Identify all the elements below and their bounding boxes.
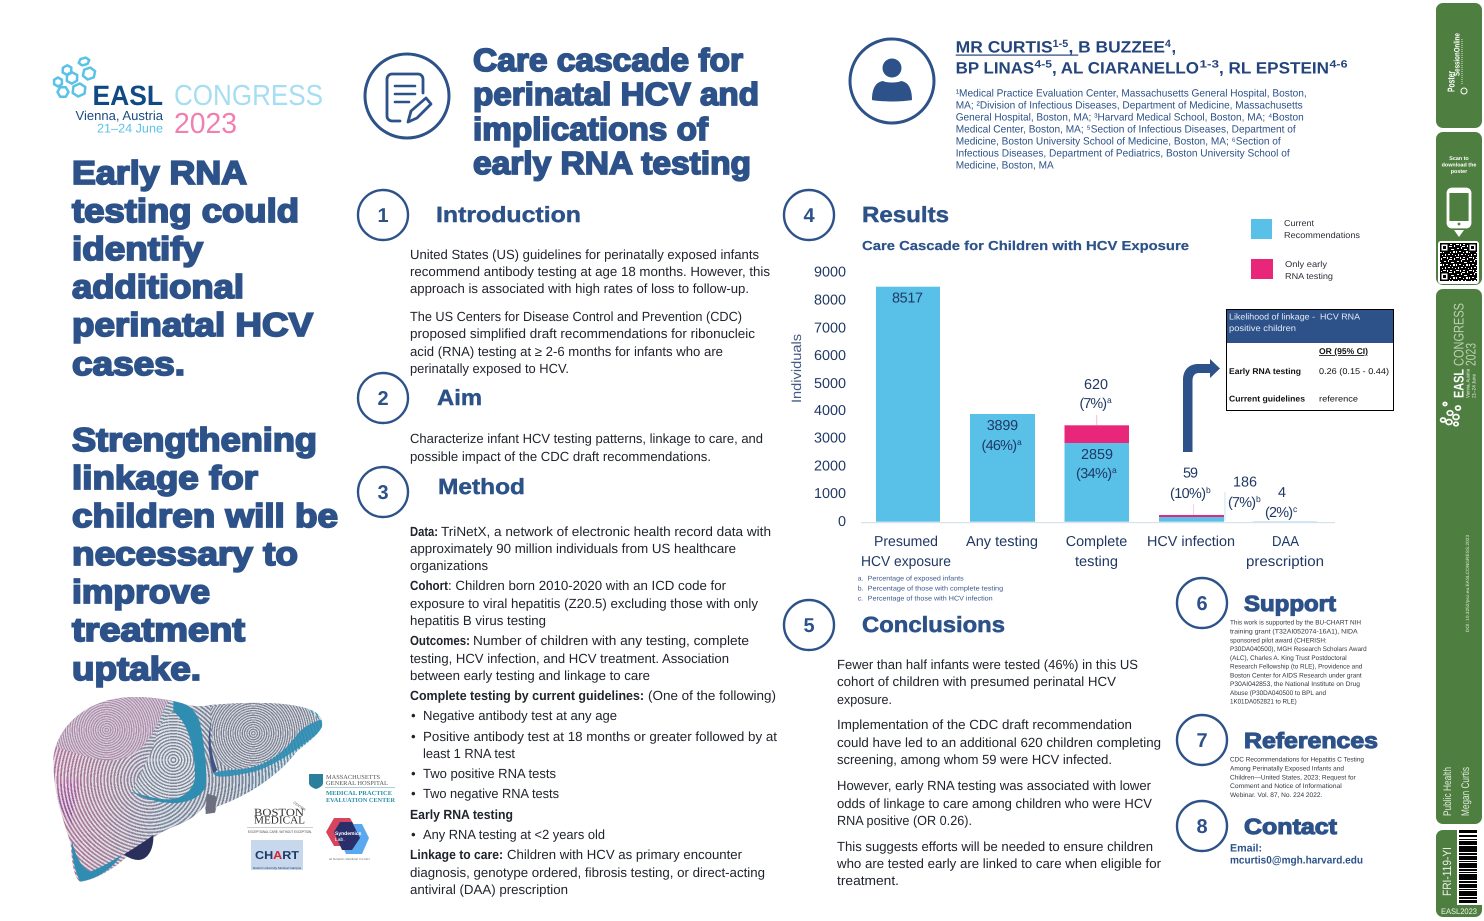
data labels: a	[1112, 465, 1117, 475]
section 5: conclusions: Conclusions	[862, 612, 1005, 637]
sidebar: EASL congress and session info: 2023	[1462, 343, 1478, 366]
chart footnotes: c.	[858, 596, 863, 603]
x axis labels: DAA	[1272, 534, 1299, 550]
support text: training grant (T32AI052074-16A1), NIDA	[1230, 629, 1358, 636]
method text: Early RNA testing	[410, 807, 513, 822]
y axis labels: 0	[838, 514, 846, 530]
method text: Linkage to care:	[410, 847, 503, 862]
x axis labels: HCV infection	[1147, 534, 1235, 550]
table: likelihood of linkage: reference	[1319, 394, 1358, 404]
method text: Positive antibody test at 18 months or greater followed by at	[423, 729, 777, 744]
bar chart: care cascade	[789, 265, 1335, 570]
data labels: c	[1293, 504, 1298, 514]
data labels: 3899	[987, 418, 1018, 434]
support text: This work is supported by the BU-CHART NIH	[1230, 620, 1361, 627]
sidebar: scan QR code	[1436, 132, 1482, 285]
sidebar: poster session online: SessionOnline	[1452, 33, 1462, 76]
support text: sponsored pilot award (CHERISH:	[1230, 637, 1327, 644]
support text: (ALC), Charles A. King Trust Postdoctoral	[1230, 655, 1347, 662]
method text: •	[411, 729, 416, 744]
introduction text: approach is associated with high rates of loss to follow-up.	[410, 281, 749, 296]
section 8: contact: Contact	[1244, 814, 1338, 839]
data labels: a	[1017, 437, 1022, 447]
data labels: 2859	[1081, 447, 1113, 463]
section 8: contact: 8	[1196, 816, 1208, 838]
method text: Cohort	[410, 578, 448, 593]
affiliations: Medicine, Boston University School of Medicine, Boston, MA; ⁶Section of	[956, 136, 1281, 148]
logo: Syndemics Lab: Syndemics	[335, 831, 362, 837]
title	[473, 42, 759, 181]
headline: key messages: Strengthening	[72, 421, 317, 458]
conclusions text: odds of linkage to care among children who were HCV	[837, 796, 1152, 811]
method text: Two negative RNA tests	[423, 786, 559, 801]
y axis title: Individuals	[789, 334, 804, 403]
title: perinatal HCV and	[473, 76, 759, 112]
section 5: conclusions	[784, 600, 1162, 888]
method text: exposure to viral hepatitis (Z20.5) excluding those with only	[410, 596, 758, 611]
introduction text: The US Centers for Disease Control and Prevention (CDC)	[410, 309, 742, 324]
section 7: references: 7	[1196, 730, 1208, 752]
data labels: 620	[1084, 377, 1108, 393]
authors: 4-5	[1034, 59, 1052, 71]
section 2: aim: 2	[377, 388, 389, 410]
y axis labels	[814, 265, 846, 530]
y axis labels: 9000	[814, 265, 846, 281]
logo: EASL Congress 2023: Vienna, Austria	[76, 108, 164, 123]
method text: (One of the following)	[648, 688, 776, 703]
method text: hepatitis B virus testing	[410, 613, 546, 628]
table: likelihood of linkage: OR (95% CI)	[1319, 346, 1368, 356]
reference text: Among Perinatally Exposed Infants and	[1230, 766, 1344, 773]
method text: Data:	[410, 524, 438, 539]
data labels	[892, 291, 1298, 521]
method text: : Children born 2010-2020 with an ICD code for	[448, 578, 727, 593]
legend: RNA testing	[1285, 271, 1333, 281]
data labels: b	[1256, 494, 1261, 504]
aim text	[410, 431, 763, 464]
logo: Massachusetts General Hospital: GENERAL HOSPITAL	[326, 780, 388, 787]
x axis labels	[861, 534, 1324, 570]
sidebar: EASL congress and session info	[1436, 289, 1482, 824]
table: likelihood of linkage	[1226, 310, 1394, 410]
legend	[1251, 218, 1360, 281]
data labels: (7%)	[1080, 396, 1107, 412]
title: implications of	[473, 111, 708, 147]
sidebar: EASL congress and session info: Vienna, Austria	[1466, 369, 1472, 398]
logo: Massachusetts General Hospital	[309, 774, 396, 804]
method text: approximately 90 million individuals from US healthcare	[410, 541, 736, 556]
introduction text: United States (US) guidelines for perinatally exposed infants	[410, 247, 759, 262]
logo: Massachusetts General Hospital: EVALUATION CENTER	[326, 797, 396, 804]
section 2: aim	[358, 373, 763, 464]
method text: Complete testing by current guidelines:	[410, 688, 644, 703]
authors	[956, 38, 1348, 77]
sidebar: poster session online	[1436, 3, 1482, 128]
section 1: introduction	[358, 190, 770, 376]
authors: 1-5	[1053, 38, 1068, 50]
logo: Syndemics Lab	[326, 818, 370, 861]
authors: BP LINAS	[956, 59, 1034, 77]
sidebar: EASL congress and session info: Public Health	[1442, 767, 1454, 816]
section 6: support	[1177, 578, 1367, 706]
y axis labels: 3000	[814, 431, 846, 447]
table: likelihood of linkage: Likelihood of linkage - HCV RNA	[1229, 311, 1360, 321]
headline: key messages: perinatal HCV	[72, 306, 313, 343]
chart footnotes: b.	[858, 586, 863, 593]
method text: •	[411, 827, 416, 842]
support text: Boston Center for AIDS Research under grant	[1230, 672, 1362, 679]
section 6: support: Support	[1244, 591, 1337, 616]
chart title: Care Cascade for Children with HCV Exposure	[862, 238, 1189, 253]
headline: key messages: necessary to	[72, 535, 298, 572]
sidebar: EASL congress and session info: DOI: 10.3252/pso.eu.EASLCONGRESS.2023	[1465, 535, 1470, 632]
y axis labels: 8000	[814, 293, 846, 309]
section 5: conclusions: 5	[803, 615, 815, 637]
introduction text: recommend antibody testing at age 18 months. However, this	[410, 264, 770, 279]
section 4: results heading: Results	[862, 202, 949, 227]
authors: 4	[1165, 38, 1171, 50]
conclusions text: screening, among whom 59 were HCV infected.	[837, 752, 1112, 767]
data labels: (46%)	[982, 438, 1017, 454]
affiliations: General Hospital, Boston, MA; ³Harvard Medical School, Boston, MA; ⁴Boston	[956, 112, 1304, 124]
sidebar: abstract number and barcode: FRI-119-YI	[1440, 847, 1454, 896]
affiliations	[956, 88, 1307, 172]
method text: diagnosis, genotype ordered, fibrosis testing, or direct-acting	[410, 865, 765, 880]
reference text: Comment and Notice of Informational	[1230, 783, 1342, 790]
support text: Abuse (P30DA040500 to BPL and	[1230, 690, 1326, 697]
method text: •	[411, 786, 416, 801]
affiliations: ¹Medical Practice Evaluation Center, Massachusetts General Hospital, Boston,	[956, 88, 1307, 100]
table: likelihood of linkage: positive children	[1229, 323, 1296, 333]
legend: Current	[1284, 218, 1315, 228]
section 7: references: References	[1244, 728, 1378, 753]
y axis labels: 1000	[814, 486, 846, 502]
authors: , RL EPSTEIN	[1219, 59, 1329, 77]
bars: current recommendations	[876, 287, 1317, 522]
affiliations: Medical Center, Boston, MA; ⁵Section of Infectious Diseases, Department of	[956, 124, 1296, 136]
method text: •	[411, 766, 416, 781]
support text: 1K01DA052821 to RLE)	[1230, 699, 1297, 706]
method text	[410, 524, 777, 897]
introduction text: acid (RNA) testing at ≥ 2-6 months for infants who are	[410, 344, 723, 359]
chart footnotes: Percentage of those with HCV infection	[868, 596, 993, 603]
logo: Boston Medical Center: EXCEPTIONAL CARE. WITHOUT EXCEPTION.	[248, 830, 312, 834]
conclusions text: who are tested early are linked to care when eligible for	[836, 856, 1162, 871]
legend: Only early	[1285, 259, 1328, 269]
data labels: (10%)	[1170, 486, 1206, 502]
x axis labels: Complete	[1066, 534, 1127, 550]
data labels: (34%)	[1076, 466, 1112, 482]
arrow: to odds ratio table	[1183, 359, 1220, 452]
support text	[1230, 620, 1367, 706]
conclusions text: cohort of children with presumed perinatal HCV	[837, 674, 1116, 689]
section 1: introduction: Introduction	[436, 202, 581, 227]
x axis labels: Presumed	[874, 534, 938, 550]
icon: document with pencil	[365, 54, 449, 138]
sidebar: EASL congress and session info: EASL	[1450, 369, 1466, 398]
title: early RNA testing	[473, 145, 751, 181]
conclusions text: could have led to an additional 620 children completing	[837, 735, 1161, 750]
logo: Syndemics Lab: at Boston Medical Center	[329, 857, 370, 861]
method text: antiviral (DAA) prescription	[410, 882, 568, 897]
title: Care cascade for	[473, 42, 743, 78]
icon: phone	[1448, 189, 1470, 227]
authors: , AL CIARANELLO	[1052, 59, 1199, 77]
data labels: 186	[1233, 475, 1257, 491]
logo: EASL Congress 2023: 2023	[174, 108, 237, 140]
authors: , B BUZZEE	[1068, 39, 1165, 57]
sidebar: scan QR code: Scan to	[1449, 156, 1469, 162]
x axis labels: prescription	[1246, 554, 1324, 570]
headline: key messages: Early RNA	[72, 154, 247, 191]
sidebar: scan QR code: poster	[1451, 169, 1468, 175]
affiliations: Infectious Diseases, Department of Pediatrics, Boston University School of	[956, 148, 1290, 160]
logo: Syndemics Lab: Lab.	[335, 837, 345, 843]
conclusions text: treatment.	[837, 873, 899, 888]
method text: between early testing and linkage to care	[410, 668, 650, 683]
x axis labels: HCV exposure	[861, 554, 951, 570]
sidebar: EASL congress and session info: CONGRESS	[1450, 303, 1466, 366]
table: likelihood of linkage: Early RNA testing	[1229, 366, 1301, 376]
authors: ,	[1172, 39, 1176, 57]
method text: testing, HCV infection, and HCV treatment. Association	[410, 651, 729, 666]
sidebar: abstract number and barcode: EASL2023	[1441, 907, 1478, 916]
logo: CHART: Boston University Medical Campus	[253, 866, 302, 870]
contact email: mcurtis0@mgh.harvard.edu	[1230, 855, 1363, 867]
table: likelihood of linkage: 0.26 (0.15 - 0.44)	[1319, 366, 1389, 376]
section 6: support: 6	[1196, 593, 1208, 615]
y axis labels: 6000	[814, 348, 846, 364]
contact email: Email:	[1230, 843, 1262, 855]
method text: least 1 RNA test	[423, 746, 515, 761]
logo: Boston Medical Center	[247, 801, 313, 834]
chart footnotes: Percentage of those with complete testing	[868, 586, 1003, 593]
logo: EASL Congress 2023: 21–24 June	[97, 122, 163, 136]
barcode	[1459, 830, 1477, 903]
section 3: method: Method	[438, 474, 525, 499]
logo: Massachusetts General Hospital: MEDICAL PRACTICE	[326, 790, 392, 797]
chart footnotes: Percentage of exposed infants	[868, 576, 964, 583]
section 4: results heading	[784, 190, 949, 240]
method text: TriNetX, a network of electronic health record data with	[441, 524, 771, 539]
chart footnotes: a.	[858, 576, 863, 583]
sidebar: scan QR code: download the	[1442, 162, 1476, 168]
headline: key messages: improve	[72, 573, 210, 610]
bars: only early RNA testing	[1064, 425, 1224, 517]
headline: key messages: children will be	[72, 497, 338, 534]
y axis labels: 5000	[814, 376, 846, 392]
logo: CHART	[251, 840, 303, 870]
headline: key messages: treatment	[72, 611, 245, 648]
table: likelihood of linkage: Current guidelines	[1229, 394, 1305, 404]
support text: P30DA040500), MGH Research Scholars Award	[1230, 646, 1367, 653]
data labels: b	[1206, 485, 1211, 495]
sidebar: EASL congress and session info: Megan Curtis	[1460, 767, 1472, 816]
affiliations: MA; ²Division of Infectious Diseases, Department of Medicine, Massachusetts	[956, 100, 1303, 112]
aim text: Characterize infant HCV testing patterns, linkage to care, and	[410, 431, 763, 446]
headline: key messages: uptake.	[72, 650, 201, 687]
logo: Boston Medical Center: CENTER	[292, 801, 307, 812]
QR code	[1438, 241, 1479, 284]
logo: Boston Medical Center: BOSTON	[254, 807, 304, 819]
section 2: aim: Aim	[437, 385, 482, 410]
method text: Children with HCV as primary encounter	[507, 847, 743, 862]
headline: key messages: linkage for	[72, 459, 258, 496]
logo: EASL Congress 2023	[52, 57, 323, 140]
logo: CHART: CHART	[255, 850, 299, 862]
introduction text	[410, 247, 770, 376]
reference text: Children—United States, 2023; Request for	[1230, 774, 1356, 781]
headline: key messages	[72, 154, 338, 687]
conclusions text	[836, 657, 1162, 888]
support text: Research Fellowship (to RLE), Providence and	[1230, 664, 1363, 671]
data labels: 4	[1278, 485, 1286, 501]
y axis labels: 2000	[814, 459, 846, 475]
conclusions text: Implementation of the CDC draft recommendation	[837, 717, 1132, 732]
method text: Outcomes:	[410, 633, 470, 648]
contact email	[1230, 843, 1363, 867]
method text: •	[411, 708, 416, 723]
reference text: Webinar. Vol. 87, No. 224 2022.	[1230, 792, 1322, 799]
section 4: results heading: 4	[803, 205, 815, 227]
logo: Massachusetts General Hospital: MASSACHUSETTS	[326, 774, 381, 781]
logo: EASL Congress 2023: CONGRESS	[174, 80, 323, 112]
introduction text: perinatally exposed to HCV.	[410, 361, 569, 376]
section 8: contact	[1177, 801, 1363, 867]
headline: key messages: testing could	[72, 192, 299, 229]
legend: Recommendations	[1284, 230, 1360, 240]
data labels: 59	[1183, 466, 1198, 482]
reference text: CDC Recommendations for Hepatitis C Testing	[1230, 757, 1364, 764]
aim text: possible impact of the CDC draft recommendations.	[410, 449, 711, 464]
support text: P30AI042853, the National Institute on Drug	[1230, 681, 1360, 688]
section 3: method: 3	[377, 482, 389, 504]
data labels: 8517	[892, 291, 923, 307]
section 3: method	[358, 467, 777, 897]
method text: organizations	[410, 558, 488, 573]
authors: 4-6	[1330, 59, 1348, 71]
data labels: a	[1107, 395, 1112, 405]
method text: Negative antibody test at any age	[423, 708, 617, 723]
introduction text: proposed simplified draft recommendations for ribonucleic	[410, 326, 755, 341]
method text: Two positive RNA tests	[423, 766, 556, 781]
affiliations: Medicine, Boston, MA	[956, 160, 1054, 172]
section 7: references	[1177, 715, 1378, 799]
authors: MR CURTIS	[956, 39, 1053, 57]
conclusions text: Fewer than half infants were tested (46%) in this US	[837, 657, 1138, 672]
logo: Boston Medical Center: MEDICAL	[254, 814, 305, 826]
y axis labels: 7000	[814, 321, 846, 337]
reference text	[1230, 757, 1364, 799]
headline: key messages: identify	[72, 230, 204, 267]
section 1: introduction: 1	[377, 205, 389, 227]
data labels: (2%)	[1265, 505, 1293, 521]
icon: person	[850, 39, 934, 123]
sidebar: abstract number and barcode	[1436, 830, 1482, 917]
conclusions text: RNA positive (OR 0.26).	[837, 813, 972, 828]
method text: Number of children with any testing, complete	[473, 633, 749, 648]
sidebar: EASL congress and session info: 21–24 June	[1472, 374, 1478, 398]
data labels: (7%)	[1228, 495, 1256, 511]
conclusions text: exposure.	[837, 692, 892, 707]
headline: key messages: cases.	[72, 345, 185, 382]
y axis labels: 4000	[814, 403, 846, 419]
sidebar: poster session online: Poster	[1446, 71, 1458, 92]
chart footnotes	[858, 576, 1003, 603]
x axis labels: testing	[1075, 554, 1118, 570]
headline: key messages: additional	[72, 268, 244, 305]
x axis labels: Any testing	[966, 534, 1038, 550]
logo: EASL Congress 2023: EASL	[92, 80, 163, 111]
illustration: liver	[50, 693, 327, 887]
conclusions text: However, early RNA testing was associated with lower	[837, 778, 1152, 793]
conclusions text: This suggests efforts will be needed to ensure children	[837, 839, 1153, 854]
method text: Any RNA testing at <2 years old	[423, 827, 605, 842]
authors: 1-3	[1200, 59, 1219, 71]
